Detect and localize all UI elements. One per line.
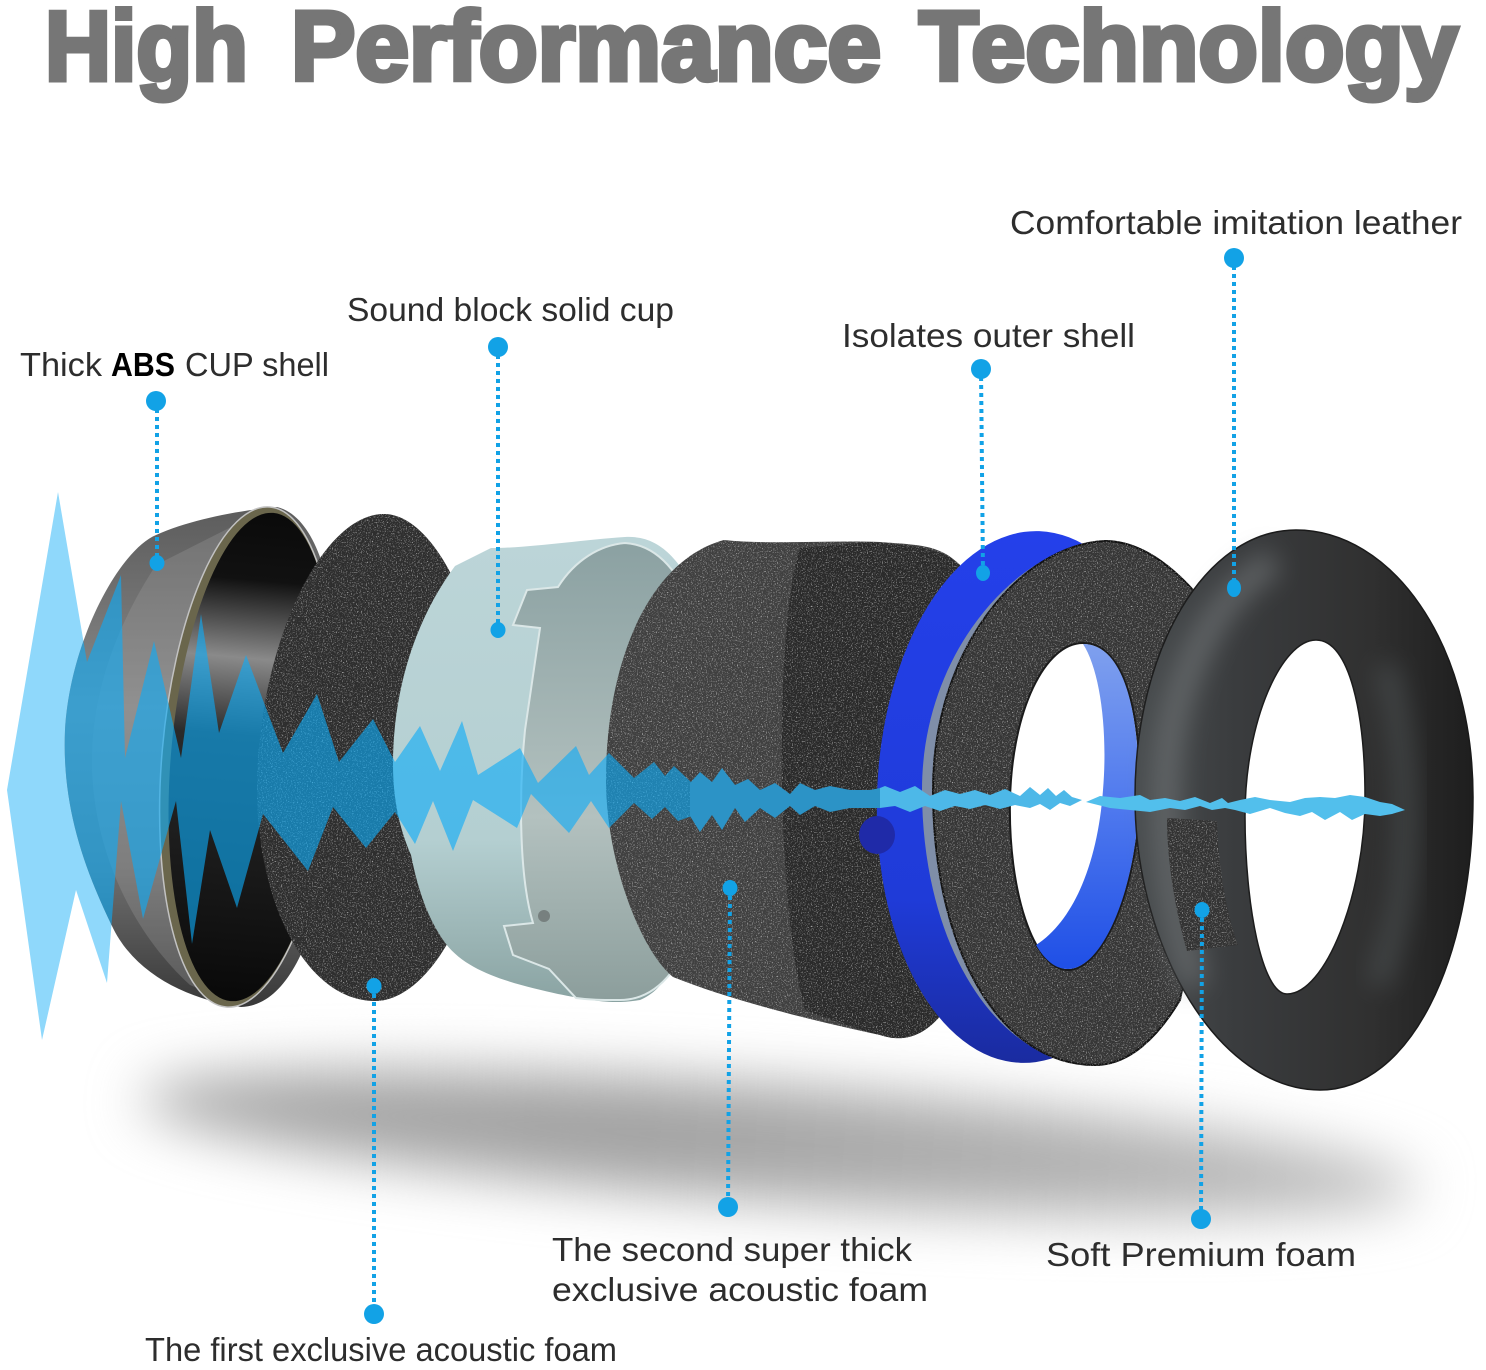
callout: Sound block solid cup <box>347 291 674 638</box>
blue button <box>859 816 895 854</box>
callout: Soft Premium foam: Soft Premium foam <box>1046 1236 1356 1273</box>
callout: Thick ABS CUP shell: ABS <box>111 346 175 383</box>
callout: Soft Premium foam <box>1046 902 1356 1273</box>
part: imitation leather cushion <box>1135 530 1473 1090</box>
floor shadow <box>138 1040 1422 1246</box>
blue inner wall crescent <box>1036 644 1139 969</box>
callout: Thick ABS CUP shell: Thick <box>20 346 103 383</box>
callout: Sound block solid cup: Sound block solid cup <box>347 291 674 328</box>
title <box>45 0 1458 101</box>
part: first acoustic foam disc <box>257 514 490 1001</box>
callout: Isolates outer shell: Isolates outer shell <box>842 317 1135 354</box>
callout: Thick ABS CUP shell: CUP shell <box>185 346 329 383</box>
soft premium foam insert <box>1167 818 1238 951</box>
thin waveform right <box>1086 795 1405 820</box>
clear glass band <box>922 541 1105 1065</box>
leather left highlight <box>1166 562 1275 985</box>
callout: The first exclusive acoustic foam: The first exclusive acoustic foam <box>145 1331 617 1368</box>
part: second super thick foam <box>606 540 990 1038</box>
thin waveform over ring <box>880 786 1082 812</box>
part: front foam ring <box>933 541 1220 1065</box>
callout: The second super thick exclusive acoustic foam: The second super thick <box>552 1231 913 1268</box>
thin waveform over foam <box>690 768 880 832</box>
light-blue sound wave base <box>7 492 692 1040</box>
callout: The second super thick exclusive acoustic foam: exclusive acoustic foam <box>552 1271 928 1308</box>
callout: Comfortable imitation leather: Comfortable imitation leather <box>1010 204 1462 241</box>
callout: Isolates outer shell <box>842 317 1135 581</box>
wave tint over parts <box>64 575 691 944</box>
part: blue outer isolating shell <box>859 526 1192 1068</box>
callout: The second super thick exclusive acoustic foam <box>552 880 928 1308</box>
callout: Comfortable imitation leather <box>1010 204 1462 597</box>
callout: The first exclusive acoustic foam <box>145 978 617 1368</box>
sound wave graphic <box>7 492 1405 1040</box>
leather inner right highlight <box>1378 665 1405 985</box>
part: ABS cup shell <box>65 499 356 1015</box>
callout: Thick ABS CUP shell <box>20 346 329 571</box>
ring hole <box>1010 643 1140 970</box>
leather hole <box>1245 640 1365 994</box>
exploded earmuff parts <box>65 499 1473 1090</box>
part: sound block solid cup <box>393 537 700 1002</box>
